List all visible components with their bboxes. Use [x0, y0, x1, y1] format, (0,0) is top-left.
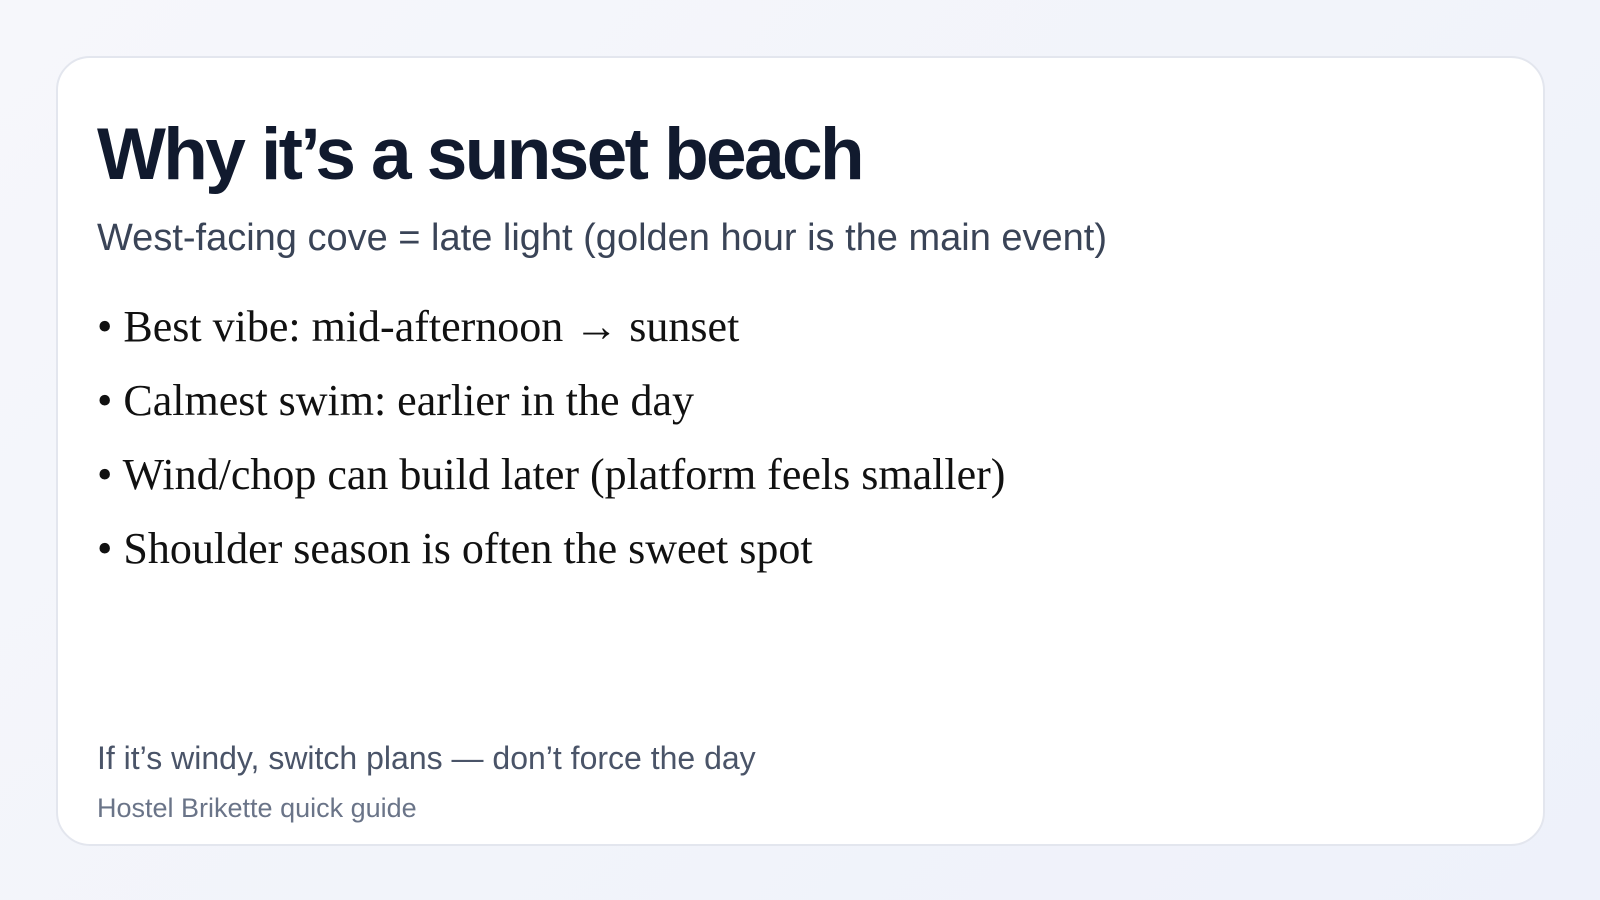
source: Hostel Brikette quick guide — [97, 793, 417, 823]
bullet list: • Calmest swim: earlier in the day — [97, 376, 694, 425]
bullet list — [97, 302, 1005, 573]
bullet list: • Shoulder season is often the sweet spot — [97, 524, 813, 573]
bullet list: • Wind/chop can build later (platform feels smaller) — [97, 450, 1005, 499]
bullet list: • Best vibe: mid-afternoon → sunset — [97, 302, 739, 351]
footer note: If it’s windy, switch plans — don’t force the day — [97, 740, 756, 776]
subtitle: West-facing cove = late light (golden hour is the main event) — [97, 217, 1107, 259]
title: Why it’s a sunset beach — [97, 114, 862, 195]
